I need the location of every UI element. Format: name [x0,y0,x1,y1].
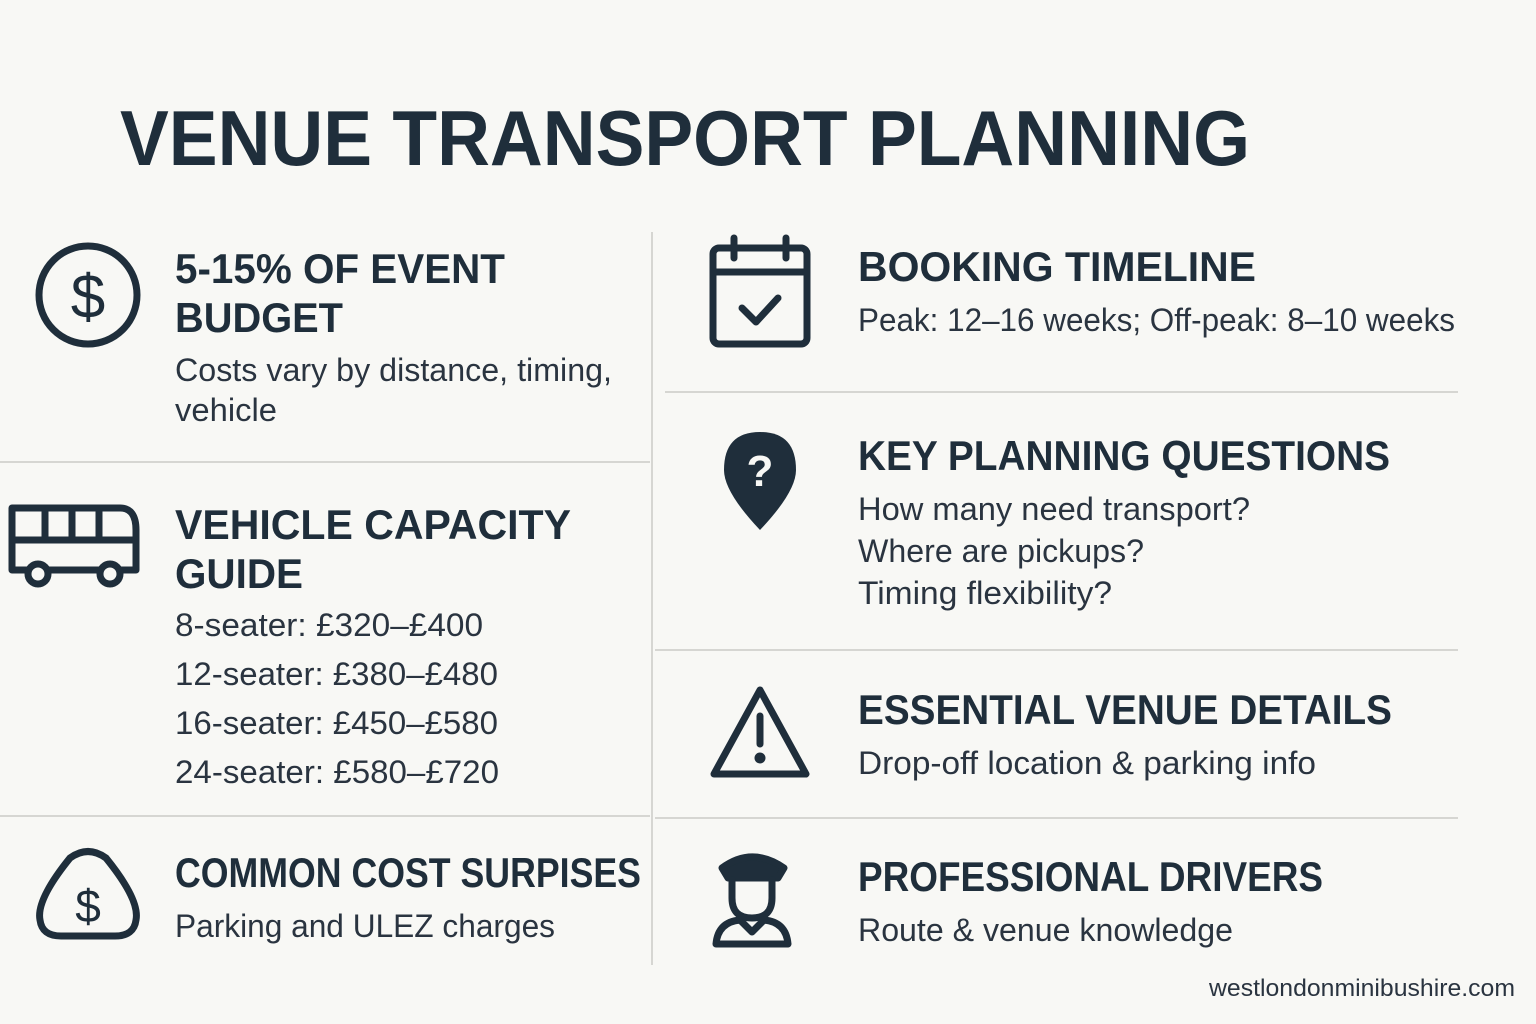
text: booking timeline: Peak: 12–16 weeks; Off-peak: 8–10 weeks [858,302,1455,338]
heading: booking timeline: BOOKING TIMELINE [858,243,1256,290]
heading: vehicle capacity: VEHICLE CAPACITY [175,501,571,548]
text: capacity prices [175,607,499,790]
heading: venue details: ESSENTIAL VENUE DETAILS [858,686,1392,733]
text: drivers: Route & venue knowledge [858,912,1233,948]
heading: vehicle capacity [175,501,571,597]
heading: budget: BUDGET [175,294,343,341]
heading: vehicle capacity: GUIDE [175,550,303,597]
text: questions: How many need transport? [858,491,1250,527]
icon: money bag: $ [75,880,101,932]
text: budget [175,352,612,428]
heading: budget: 5-15% OF EVENT [175,245,505,292]
panel: drivers [716,853,1323,948]
icon: money bag [40,852,136,936]
text: venue details: Drop-off location & parking info [858,745,1316,781]
icon: calendar [713,238,807,344]
text: questions [858,491,1250,611]
icon: warning [714,690,806,774]
icon: bus [12,508,136,584]
text: capacity prices: 16-seater: £450–£580 [175,705,498,741]
text: questions: Timing flexibility? [858,575,1112,611]
text: budget: vehicle [175,392,277,428]
text: capacity prices: 8-seater: £320–£400 [175,607,483,643]
panel: key questions [724,432,1390,611]
heading: budget [175,245,505,341]
icon: dollar circle: $ [71,263,105,332]
panel: budget [39,245,612,428]
heading: key questions: KEY PLANNING QUESTIONS [858,432,1390,479]
heading: drivers: PROFESSIONAL DRIVERS [858,853,1323,900]
text: capacity prices: 24-seater: £580–£720 [175,754,499,790]
panel: venue details [714,686,1392,781]
icon: question pin: ? [747,447,773,496]
heading: cost surprises: COMMON COST SURPISES [175,849,641,896]
panel: booking timeline [713,238,1455,344]
text: budget: Costs vary by distance, timing, [175,352,612,388]
icon: dollar circle [39,246,137,344]
panel: cost surprises [40,849,641,944]
icon: driver [716,857,788,944]
icon: question pin [724,432,796,530]
text: cost surprises: Parking and ULEZ charges [175,908,555,944]
text: capacity prices: 12-seater: £380–£480 [175,656,498,692]
text: questions: Where are pickups? [858,533,1144,569]
panel: vehicle capacity [12,501,571,790]
title: VENUE TRANSPORT PLANNING [120,94,1250,182]
footer url: westlondonminibushire.com [1208,975,1515,1002]
